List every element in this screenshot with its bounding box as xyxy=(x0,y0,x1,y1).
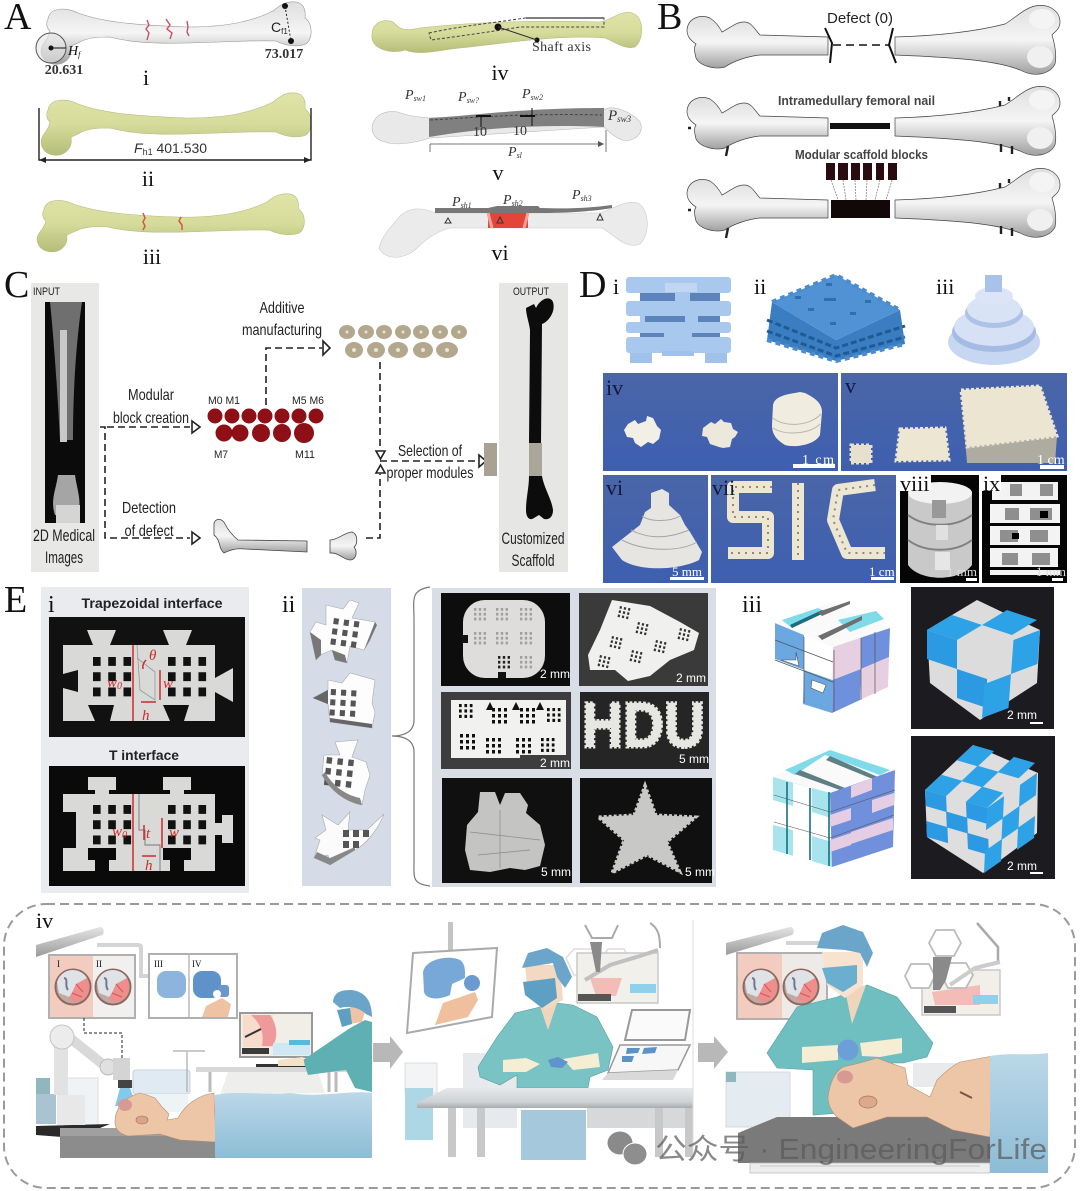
seated nurse xyxy=(278,990,372,1092)
surgical robot and screen xyxy=(566,923,660,1003)
standing surgeon xyxy=(478,948,613,1088)
D vii photo: SIC letters from blocks xyxy=(711,475,896,583)
trapezoidal puzzle blocks: 0 xyxy=(117,681,122,692)
illustration: imaging and robotic scan xyxy=(36,927,372,1158)
femur v with plate dimensions: P xyxy=(522,87,531,102)
femur v with plate dimensions: 10 xyxy=(513,124,527,139)
additive manufacturing label: manufacturing xyxy=(242,322,322,339)
illustration: implantation xyxy=(726,923,1048,1173)
computer monitor xyxy=(240,1013,312,1067)
D iv photo: printed discs xyxy=(603,373,838,471)
femur v with plate dimensions: sl xyxy=(517,151,523,160)
D viii micro-CT cylinder: viii xyxy=(900,471,929,496)
D viii micro-CT cylinder: 1 mm xyxy=(947,564,977,579)
D iv photo: printed discs: 1 cm xyxy=(802,453,834,468)
T interface puzzle blocks: 0 xyxy=(122,830,127,841)
femur iv with shaft axis: Shaft axis xyxy=(532,40,591,55)
D ii square lattice render: ii xyxy=(754,274,766,299)
E ii photographs of assembled shapes xyxy=(432,588,716,887)
femur i with measurements: C xyxy=(271,19,281,35)
photo: star shape: 5 mm xyxy=(685,865,715,879)
dashed workflow arrows xyxy=(100,341,527,544)
femur v with plate dimensions: sw? xyxy=(467,96,479,105)
femur v with plate dimensions: P xyxy=(458,90,467,105)
femur i with measurements xyxy=(36,2,311,90)
panel letter E: E xyxy=(4,579,27,621)
additive manufacturing label: Additive xyxy=(260,300,305,317)
femur v with plate dimensions: sw2 xyxy=(531,93,543,102)
D i stacked disc render xyxy=(613,274,731,363)
monitor with scaffold blocks xyxy=(149,954,237,1018)
femur i with measurements: f1 xyxy=(281,27,288,36)
D iv photo: printed discs: iv xyxy=(606,375,623,400)
additive manufacturing label xyxy=(242,300,322,339)
red modular blocks: M5 M6 xyxy=(292,395,324,407)
panel letter C: C xyxy=(4,264,29,306)
D iii stepped cone render xyxy=(936,274,1040,365)
femur v with plate dimensions: 10 xyxy=(473,125,487,140)
patient blanket xyxy=(990,1053,1048,1173)
E ii block shape library: ii xyxy=(282,592,296,618)
detection of defect label: Detection xyxy=(122,500,176,517)
D ix micro-CT section: 1 mm xyxy=(1036,564,1066,579)
photo: star shape xyxy=(580,778,715,883)
femur v with plate dimensions xyxy=(372,87,641,185)
robotic arm xyxy=(36,1025,136,1138)
row: defect xyxy=(687,5,1060,74)
D vii photo: SIC letters from blocks: vii xyxy=(712,475,735,500)
monitor with tissue views xyxy=(49,955,135,1018)
femur i with measurements: H xyxy=(68,44,78,59)
D v photo: printed lattices: 1 cm xyxy=(1037,453,1065,468)
femur vi with plate and red defect: P xyxy=(572,188,581,203)
trapezoidal puzzle blocks: θ xyxy=(149,648,157,664)
D v photo: printed lattices: v xyxy=(845,373,856,398)
femur v with plate dimensions: v xyxy=(492,160,504,185)
red modular blocks: M7 xyxy=(214,449,228,461)
photo: rectangular block assembly xyxy=(441,692,571,770)
E iii cube assemblies xyxy=(742,587,1055,879)
table frame xyxy=(750,1163,990,1173)
E i interface designs: i xyxy=(48,592,55,618)
output column with black femur scaffold: Scaffold xyxy=(512,551,554,570)
CAD cube with two-colour blocks xyxy=(775,601,890,713)
E iii cube assemblies: iii xyxy=(742,592,762,618)
femur vi with plate and red defect: sh1 xyxy=(461,201,472,210)
femur v with plate dimensions: P xyxy=(608,108,617,124)
E iv surgical workflow frame xyxy=(4,904,1075,1188)
surgical robot and screen xyxy=(905,923,1000,1015)
D v photo: printed lattices xyxy=(841,373,1067,471)
row: intramedullary nail xyxy=(687,86,1060,156)
patient blanket xyxy=(215,1092,372,1158)
modular block creation labels: Modular xyxy=(128,387,175,404)
selection label and selected module xyxy=(386,443,497,482)
photo: HDU letters: 5 mm xyxy=(679,752,709,766)
standing surgeon over patient xyxy=(767,925,933,1115)
D vi photo: stepped cone: vi xyxy=(606,475,623,500)
femur ii with length dimension: 401.530 xyxy=(153,140,207,156)
modular block creation labels xyxy=(113,387,189,427)
femur i with measurements: 20.631 xyxy=(45,63,83,78)
trapezoidal puzzle blocks: w xyxy=(163,676,173,692)
monitor with tissue views: I xyxy=(57,959,60,969)
E i interface designs xyxy=(41,587,249,893)
femur vi with plate and red defect: sh2 xyxy=(512,199,523,208)
panel B: fixation concept xyxy=(657,0,1060,238)
femur i with measurements: 73.017 xyxy=(265,47,303,62)
photo: fan block assembly: 2 mm xyxy=(676,671,706,685)
input column with x-ray xyxy=(31,283,99,572)
arrow between steps two and three xyxy=(698,1036,728,1069)
panel E: interfaces and shapes xyxy=(4,579,1075,1188)
CAD cube with three-colour blocks xyxy=(773,750,895,867)
monitor with scaffold blocks: IV xyxy=(192,959,202,969)
E i interface designs: Trapezoidal interface xyxy=(82,595,223,611)
monitor with tissue views: II xyxy=(96,959,102,969)
femur ii with length dimension: F xyxy=(134,140,144,156)
row: defect: Defect (0) xyxy=(827,10,893,27)
femur ii with length dimension: h1 xyxy=(143,147,153,157)
femur v with plate dimensions: P xyxy=(405,88,414,103)
femur i with measurements: f xyxy=(78,50,82,59)
surgeon lower gown xyxy=(521,1110,586,1160)
femur iii with fracture lines xyxy=(37,194,304,269)
panel A: femur models xyxy=(4,0,647,269)
photo: three-colour cube xyxy=(911,736,1055,879)
input column with x-ray: Images xyxy=(45,548,83,567)
panel D: modular constructs xyxy=(579,264,1067,583)
D ii square lattice render xyxy=(754,274,905,361)
photo: rounded block assembly: 2 mm xyxy=(540,667,570,681)
photo: two-colour cube xyxy=(911,587,1054,729)
femur vi with plate and red defect: sh3 xyxy=(581,194,592,203)
monitor with tissue views xyxy=(737,953,827,1019)
T interface puzzle blocks: t xyxy=(146,826,151,842)
D vii photo: SIC letters from blocks: 1 cm xyxy=(869,564,895,579)
femur v with plate dimensions: sw1 xyxy=(414,94,426,103)
trapezoidal puzzle blocks: w xyxy=(107,675,117,691)
panel letter D: D xyxy=(579,264,606,306)
D ix micro-CT section: ix xyxy=(983,471,1000,496)
femur iv with shaft axis xyxy=(372,12,642,85)
femur ii with length dimension: ii xyxy=(142,166,154,191)
patient head and torso xyxy=(828,1056,993,1137)
femur i with measurements: i xyxy=(143,65,149,90)
row: modular scaffold blocks: Modular scaffold blocks xyxy=(795,148,928,162)
D vi photo: stepped cone: 5 mm xyxy=(672,564,702,579)
femur ii with length dimension xyxy=(39,93,311,191)
D vi photo: stepped cone xyxy=(603,475,708,583)
divider between scenes xyxy=(692,920,694,1160)
D i stacked disc render: i xyxy=(613,274,619,299)
red modular blocks: M11 xyxy=(295,449,315,461)
D ix micro-CT section xyxy=(982,471,1067,583)
photo: three-colour cube: 2 mm xyxy=(1007,859,1037,873)
photo: fan block assembly xyxy=(579,593,708,686)
operating table xyxy=(738,1117,990,1163)
femur vi with plate and red defect: P xyxy=(503,193,512,208)
brace connecting shapes to photos xyxy=(392,587,430,886)
T interface puzzle blocks: h xyxy=(145,858,152,874)
femur vi with plate and red defect xyxy=(379,188,647,265)
photo: HDU letters: HDU xyxy=(582,689,705,761)
output column with black femur scaffold: OUTPUT xyxy=(513,286,549,298)
modular block creation labels: block creation xyxy=(113,410,189,427)
watermark: 公众号 · EngineeringForLife xyxy=(655,1134,1047,1166)
trapezoidal puzzle blocks xyxy=(63,630,233,724)
E iv surgical workflow frame: iv xyxy=(36,908,53,933)
photo: rounded block assembly xyxy=(441,593,570,686)
detection of defect label xyxy=(122,500,176,540)
femur v with plate dimensions: P xyxy=(508,145,517,160)
photo: two-colour cube: 2 mm xyxy=(1007,708,1037,722)
E ii block shape library xyxy=(282,588,391,886)
row: modular scaffold blocks xyxy=(687,148,1060,238)
T interface puzzle blocks: w xyxy=(169,825,179,841)
detection of defect label: of defect xyxy=(124,523,174,540)
row: intramedullary nail: Intramedullary femoral nail xyxy=(778,94,935,108)
photo: bottle shape xyxy=(442,778,572,883)
arrow between steps one and two xyxy=(373,1036,403,1069)
panel C: customised scaffold workflow xyxy=(4,264,568,572)
output column with black femur scaffold: Customized xyxy=(502,529,564,548)
selection label and selected module: proper modules xyxy=(386,465,474,482)
tray of blocks xyxy=(602,1010,690,1080)
femur vi with plate and red defect: P xyxy=(452,195,461,210)
D viii micro-CT cylinder xyxy=(900,471,979,583)
femur vi with plate and red defect: vi xyxy=(491,240,509,265)
illustration: block selection xyxy=(405,922,693,1160)
femur iii with fracture lines: iii xyxy=(143,244,161,269)
monitor with scaffold blocks: III xyxy=(154,959,163,969)
photo: rectangular block assembly: 2 mm xyxy=(540,756,570,770)
red modular blocks: M0 M1 xyxy=(208,395,240,407)
T interface puzzle blocks: w xyxy=(112,824,122,840)
femur v with plate dimensions: sw3 xyxy=(617,114,632,124)
input column with x-ray: INPUT xyxy=(33,286,60,298)
T interface puzzle blocks xyxy=(63,777,233,874)
photo: bottle shape: 5 mm xyxy=(541,865,571,879)
patient on table xyxy=(60,1093,216,1158)
input column with x-ray: 2D Medical xyxy=(33,526,95,545)
defective femur pieces xyxy=(214,519,357,560)
selection label and selected module: Selection of xyxy=(398,443,462,460)
output column with black femur scaffold xyxy=(499,283,568,572)
femur iv with shaft axis: iv xyxy=(491,60,509,85)
D iii stepped cone render: iii xyxy=(936,274,954,299)
steel table xyxy=(417,1088,693,1108)
E i interface designs: T interface xyxy=(109,747,179,763)
red modular blocks xyxy=(208,395,324,461)
trapezoidal puzzle blocks: h xyxy=(142,708,150,724)
printed beige blocks xyxy=(339,325,467,358)
